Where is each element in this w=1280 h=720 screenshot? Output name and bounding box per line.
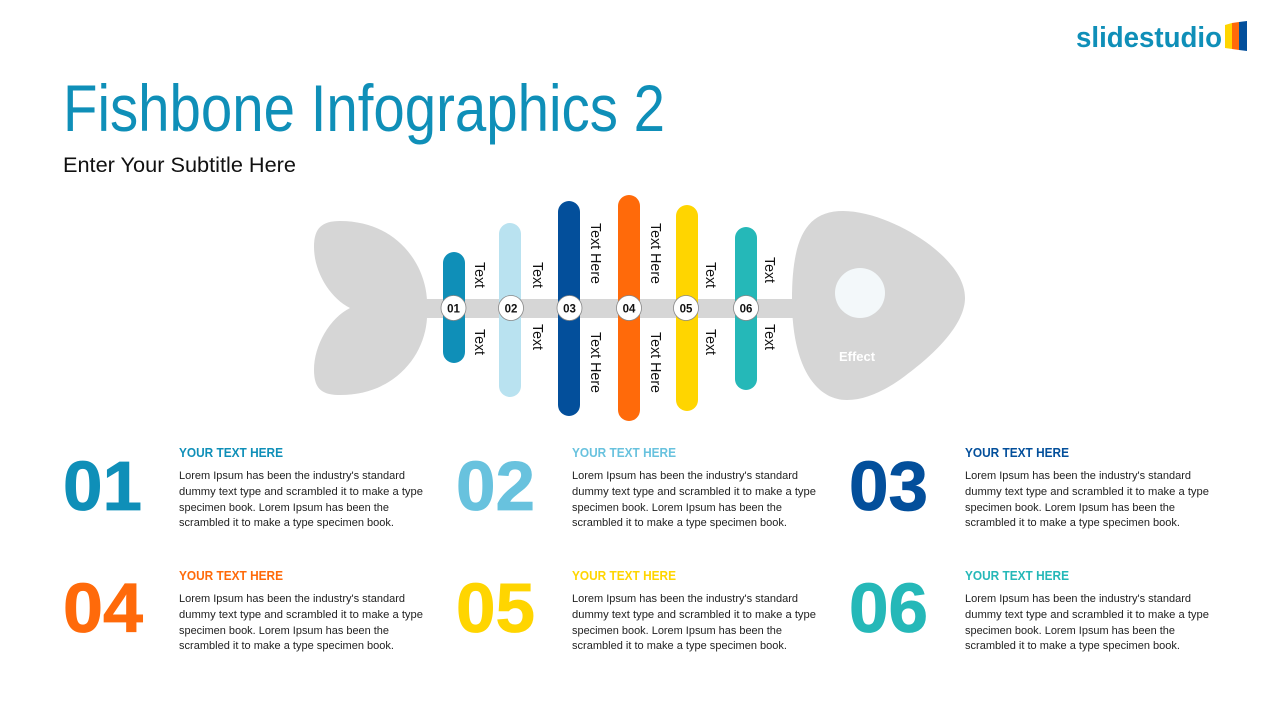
- bone 06: 06: [740, 304, 752, 316]
- bone 01: [441, 252, 488, 363]
- bone 06: Text: [761, 257, 778, 284]
- panel: item 01: scrambled it to make a type specimen book.: [179, 517, 394, 529]
- panel: item 05: Lorem Ipsum has been the industry's standard: [572, 593, 798, 605]
- panel: item 02: [456, 446, 816, 529]
- panel: item 06: specimen book. Lorem Ipsum has been the: [965, 625, 1175, 637]
- subtitle: Enter Your Subtitle Here: [63, 154, 296, 177]
- bone 05: Text: [702, 329, 719, 356]
- title: Fishbone Infographics 2: [63, 71, 665, 145]
- bone 06: Text: [761, 324, 778, 351]
- panel: item 01: dummy text type and scrambled it to make a type: [179, 486, 423, 498]
- panel: item 04: specimen book. Lorem Ipsum has been the: [179, 625, 389, 637]
- bone 04: [616, 195, 664, 421]
- panel: item 05: YOUR TEXT HERE: [572, 569, 676, 583]
- panel: item 01: specimen book. Lorem Ipsum has been the: [179, 502, 389, 514]
- bone 03: [557, 201, 604, 416]
- panel: item 04: [63, 569, 423, 652]
- panel: item 02: 02: [456, 447, 535, 525]
- panel: item 04: dummy text type and scrambled it to make a type: [179, 609, 423, 621]
- panel: item 03: 03: [849, 447, 928, 525]
- bone 03: Text Here: [587, 332, 604, 393]
- bone 03: Text Here: [587, 223, 604, 284]
- panel: item 03: dummy text type and scrambled it to make a type: [965, 486, 1209, 498]
- panel: item 03: [849, 446, 1209, 529]
- fish tail: [314, 221, 427, 395]
- bone 01: Text: [471, 262, 488, 289]
- panel: item 05: [456, 569, 816, 652]
- panel: item 06: [849, 569, 1209, 652]
- fish head: [792, 211, 965, 400]
- panel: item 06: 06: [849, 569, 928, 647]
- panel: item 02: scrambled it to make a type specimen book.: [572, 517, 787, 529]
- panel: item 04: scrambled it to make a type specimen book.: [179, 640, 394, 652]
- bone 04: 04: [623, 304, 636, 316]
- bone 05: [674, 205, 719, 411]
- panel: item 05: specimen book. Lorem Ipsum has been the: [572, 625, 782, 637]
- panel: item 02: Lorem Ipsum has been the industry's standard: [572, 470, 798, 482]
- bone 02: Text: [529, 324, 546, 351]
- bone 02: 02: [505, 304, 517, 316]
- bone 02: Text: [529, 262, 546, 289]
- spine: [425, 299, 795, 318]
- panel: item 04: 04: [63, 569, 143, 647]
- fishbone diagram: [314, 195, 965, 421]
- panel: item 03: YOUR TEXT HERE: [965, 446, 1069, 460]
- panel: item 02: YOUR TEXT HERE: [572, 446, 676, 460]
- bone 04: Text Here: [647, 223, 664, 284]
- panel: item 02: specimen book. Lorem Ipsum has been the: [572, 502, 782, 514]
- bone 05: 05: [680, 304, 693, 316]
- fish head: Effect: [839, 349, 876, 364]
- panel: item 01: Lorem Ipsum has been the industry's standard: [179, 470, 405, 482]
- panel: item 05: 05: [456, 569, 535, 647]
- bone 02: [498, 223, 546, 397]
- panel: item 03: scrambled it to make a type specimen book.: [965, 517, 1180, 529]
- panel: item 01: YOUR TEXT HERE: [179, 446, 283, 460]
- panel: item 01: [63, 446, 423, 529]
- panel: item 02: dummy text type and scrambled it to make a type: [572, 486, 816, 498]
- bone 01: Text: [471, 329, 488, 356]
- panel: item 03: specimen book. Lorem Ipsum has been the: [965, 502, 1175, 514]
- panel: item 05: dummy text type and scrambled it to make a type: [572, 609, 816, 621]
- logo: slidestudio: slidestudio: [1076, 22, 1222, 54]
- bone 04: Text Here: [647, 332, 664, 393]
- panel: item 06: YOUR TEXT HERE: [965, 569, 1069, 583]
- panel: item 01: 01: [63, 447, 142, 525]
- bone 01: 01: [447, 304, 460, 316]
- panel: item 06: Lorem Ipsum has been the industry's standard: [965, 593, 1191, 605]
- panel: item 06: dummy text type and scrambled it to make a type: [965, 609, 1209, 621]
- panel: item 06: scrambled it to make a type specimen book.: [965, 640, 1180, 652]
- bone 06: [734, 227, 778, 390]
- panel: item 04: Lorem Ipsum has been the industry's standard: [179, 593, 405, 605]
- panel: item 05: scrambled it to make a type specimen book.: [572, 640, 787, 652]
- bone 03: 03: [563, 304, 576, 316]
- panel: item 04: YOUR TEXT HERE: [179, 569, 283, 583]
- panel: item 03: Lorem Ipsum has been the industry's standard: [965, 470, 1191, 482]
- bone 05: Text: [702, 262, 719, 289]
